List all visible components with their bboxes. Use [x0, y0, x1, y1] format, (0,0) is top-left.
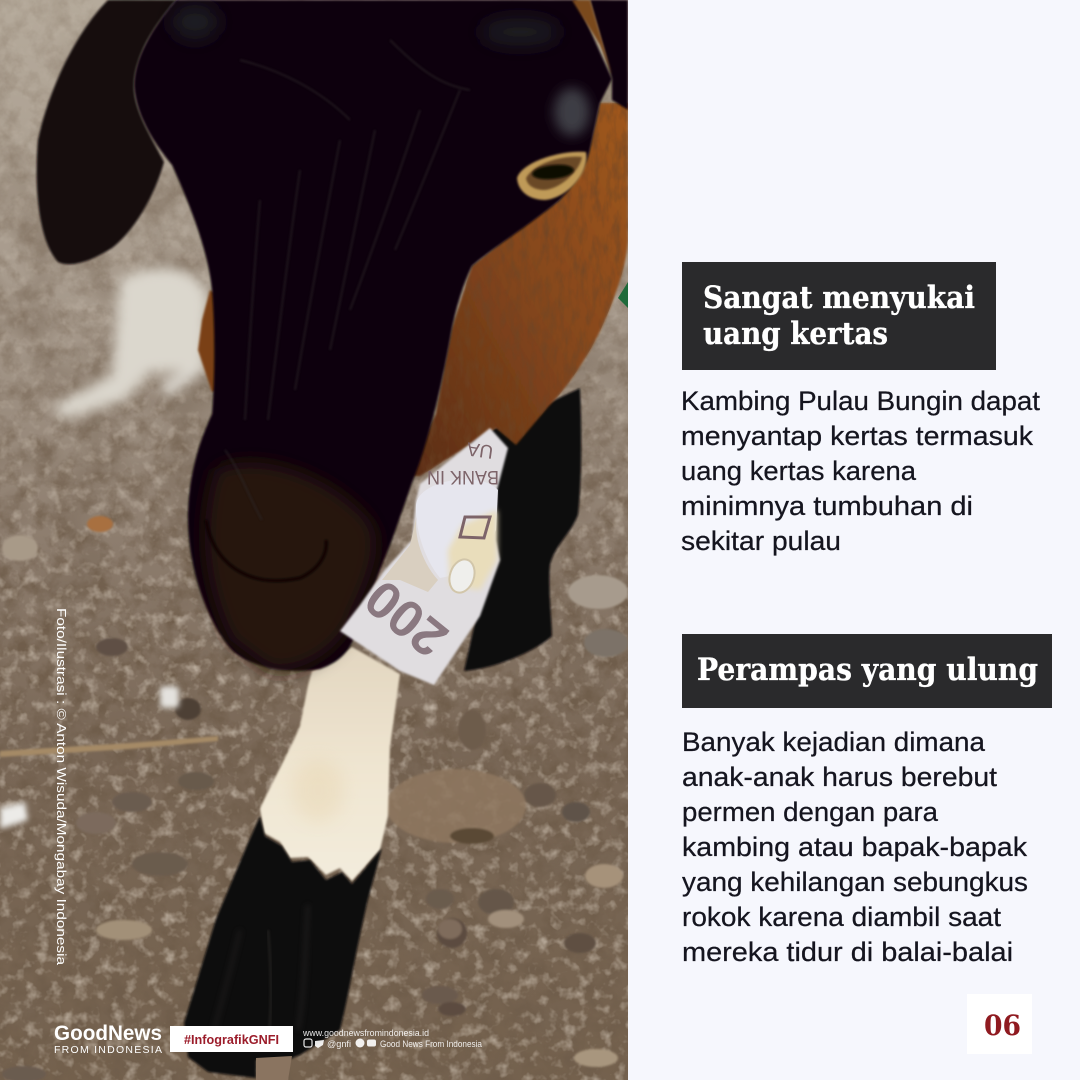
heading: Sangat menyukai uang kertas: uang kertas: [703, 316, 888, 352]
photo credit: Foto/Ilustrasi : © Anton Wisuda/Mongabay Indonesia: [54, 608, 69, 966]
footer logo: GoodNews from Indonesia: FROM INDONESIA: [54, 1044, 162, 1056]
heading: Perampas yang ulung: Perampas yang ulung: [697, 652, 1038, 688]
footer social links: @gnfi: [327, 1039, 351, 1049]
goat white foreleg: [260, 647, 400, 881]
goat eye: [517, 152, 586, 200]
banknote value: 200: [355, 568, 459, 668]
heading: Perampas yang ulung: [682, 634, 1052, 708]
hashtag badge: #InfografikGNFI: [184, 1032, 279, 1047]
photo: goat eating a banknote: [0, 0, 628, 1080]
banknote print upper: UA: [465, 437, 495, 462]
heading: Sangat menyukai uang kertas: Sangat menyukai: [703, 280, 975, 316]
heading: Sangat menyukai uang kertas: [682, 262, 996, 370]
banknote square mark: [460, 517, 490, 538]
banknote: [340, 428, 508, 685]
collar fragment: [618, 282, 628, 308]
footer social links: Good News From Indonesia: [380, 1039, 482, 1049]
footer logo: GoodNews from Indonesia: GoodNews: [54, 1022, 162, 1045]
page number: 06: [984, 1009, 1021, 1042]
footer social links: [302, 1028, 482, 1049]
goat brown neck: [198, 100, 628, 480]
goat black hoof: [184, 816, 382, 1080]
text block: snatching stories: yang kehilangan sebungkus: [682, 867, 1028, 897]
text block: paper-eating explanation: minimnya tumbuhan di: [681, 491, 973, 521]
goat far side of head: [590, 0, 628, 110]
goat ear: [37, 0, 176, 264]
footer logo: GoodNews from Indonesia: [54, 1022, 162, 1056]
footer social links: www.goodnewsfromindonesia.id: [302, 1028, 429, 1038]
text block: snatching stories: [682, 727, 1028, 967]
text block: paper-eating explanation: uang kertas karena: [681, 456, 917, 486]
text block: snatching stories: rokok karena diambil saat: [682, 902, 1002, 932]
text block: snatching stories: kambing atau bapak-bapak: [682, 832, 1028, 862]
page number: [967, 994, 1032, 1054]
text block: snatching stories: anak-anak harus berebut: [682, 762, 998, 792]
banknote oval: [448, 558, 476, 594]
text block: paper-eating explanation: sekitar pulau: [681, 526, 841, 556]
hashtag badge: [170, 1026, 293, 1052]
text block: paper-eating explanation: [681, 386, 1041, 556]
banknote print top: BANK IN: [427, 466, 499, 487]
goat head: [134, 0, 612, 671]
text block: snatching stories: Banyak kejadian dimana: [682, 727, 986, 757]
text block: paper-eating explanation: menyantap kertas termasuk: [681, 421, 1034, 451]
goat rear leg: [464, 388, 581, 671]
text block: snatching stories: permen dengan para: [682, 797, 939, 827]
text block: snatching stories: mereka tidur di balai-balai: [682, 937, 1013, 967]
text block: paper-eating explanation: Kambing Pulau Bungin dapat: [681, 386, 1041, 416]
